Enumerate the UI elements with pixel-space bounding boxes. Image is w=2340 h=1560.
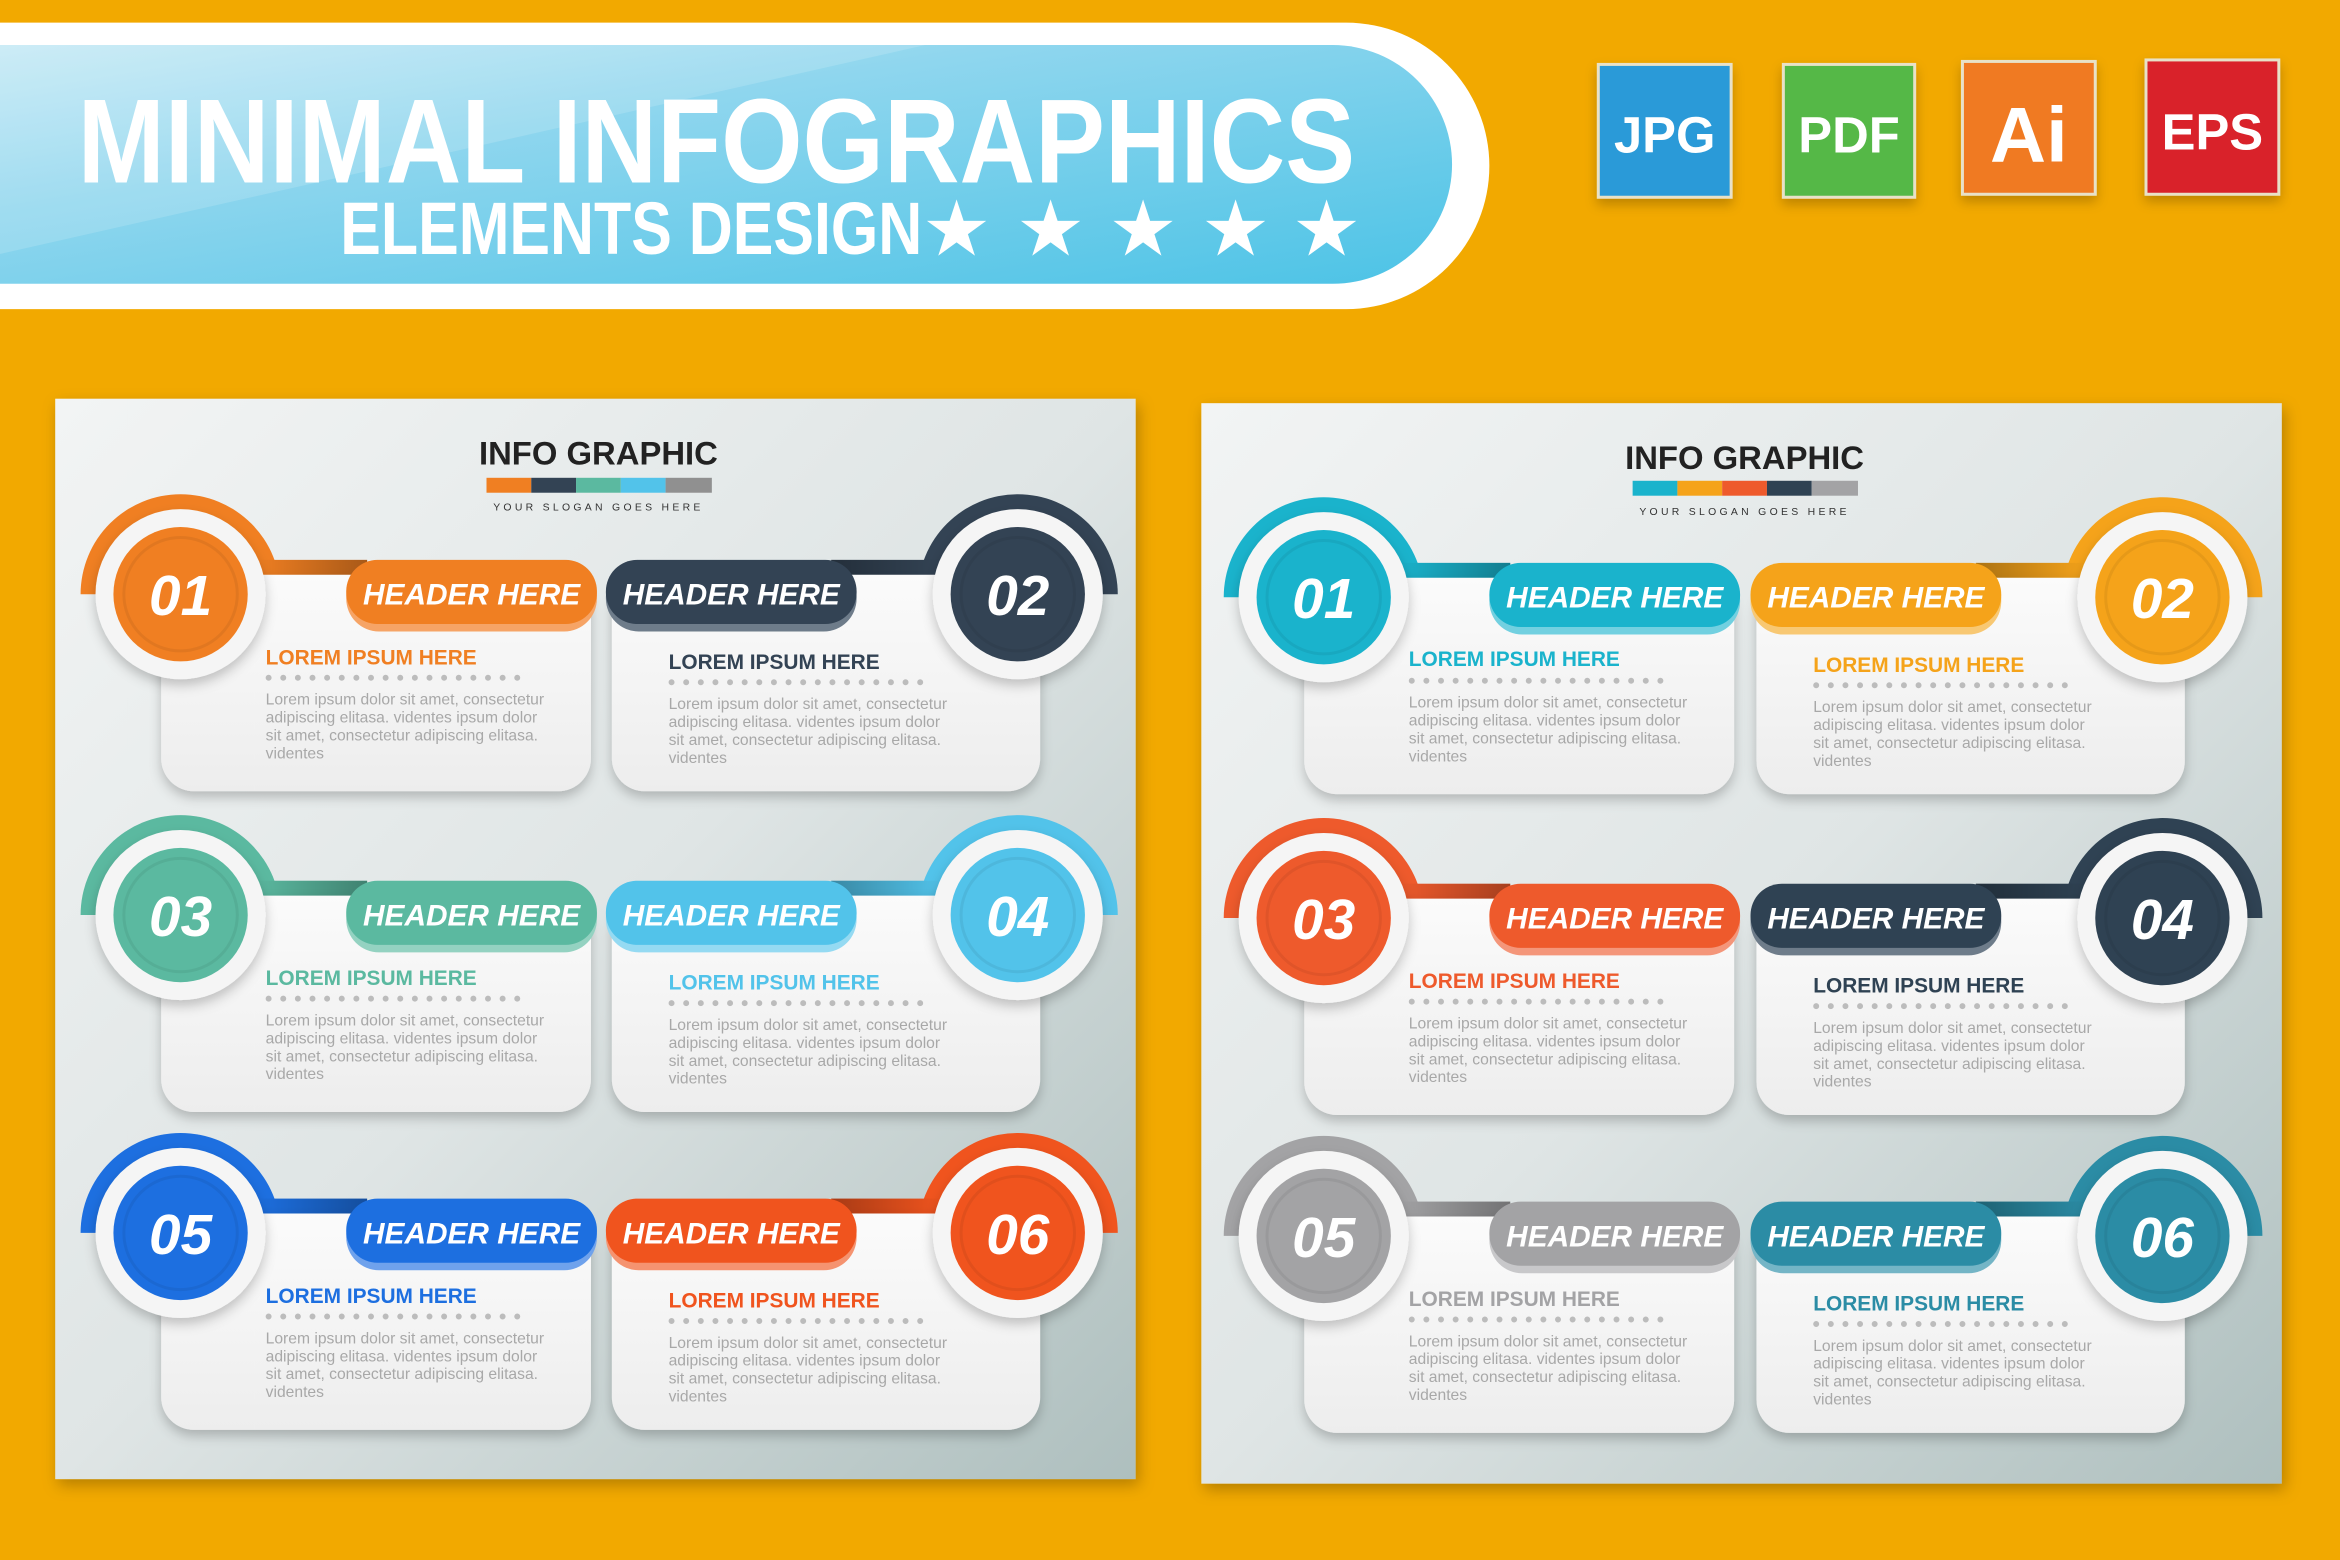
card 04: [606, 815, 1118, 1112]
card 06: 06: [986, 1204, 1050, 1267]
card 05 right: [1224, 1136, 1740, 1433]
card 03 right: sit amet, consectetur adipiscing elitasa.: [1409, 1051, 1681, 1068]
card 02: HEADER HERE: [623, 579, 841, 612]
card 05: LOREM IPSUM HERE: [266, 1285, 477, 1308]
card 04 right: HEADER HERE: [1767, 902, 1986, 935]
icon: Ai: Ai: [1990, 92, 2068, 178]
card 01: Lorem ipsum dolor sit amet, consectetur: [266, 692, 544, 709]
card 06 right: sit amet, consectetur adipiscing elitasa.: [1813, 1374, 2086, 1391]
icon: Ai: [1962, 61, 2095, 194]
card 04: adipiscing elitasa. videntes ipsum dolor: [669, 1035, 940, 1052]
card 06: adipiscing elitasa. videntes ipsum dolor: [669, 1353, 940, 1370]
card 03: sit amet, consectetur adipiscing elitasa.: [266, 1048, 538, 1065]
card 02: sit amet, consectetur adipiscing elitasa.: [669, 732, 941, 749]
card 05: HEADER HERE: [363, 1217, 581, 1250]
card 01: 01: [149, 565, 212, 628]
card 02 right: sit amet, consectetur adipiscing elitasa.: [1813, 735, 2086, 752]
card 05: 05: [149, 1204, 214, 1267]
card 03: LOREM IPSUM HERE: [266, 967, 477, 990]
heading: info graphic: INFO GRAPHIC: [479, 434, 718, 471]
card 04: sit amet, consectetur adipiscing elitasa.: [669, 1053, 941, 1070]
card 06: [606, 1133, 1118, 1430]
heading: info graphic: YOUR SLOGAN GOES HERE: [493, 503, 704, 514]
heading: info graphic: [479, 434, 718, 514]
card 05 right: HEADER HERE: [1506, 1220, 1724, 1253]
card 04: videntes: [669, 1071, 727, 1088]
card 04 right: sit amet, consectetur adipiscing elitasa.: [1813, 1056, 2086, 1073]
card 03: 03: [149, 886, 212, 949]
stars: ★: [1112, 190, 1174, 267]
card 06 right: 06: [2131, 1207, 2194, 1270]
card 01 right: [1224, 497, 1740, 794]
card 05: sit amet, consectetur adipiscing elitasa.: [266, 1366, 538, 1383]
card 05 right: videntes: [1409, 1387, 1467, 1404]
card 02 right: [1751, 497, 2262, 794]
card 01 right: Lorem ipsum dolor sit amet, consectetur: [1409, 695, 1687, 712]
card 05: [81, 1133, 597, 1430]
heading: info graphic right: [1625, 439, 1864, 518]
card 03 right: adipiscing elitasa. videntes ipsum dolor: [1409, 1033, 1680, 1050]
card 04: 04: [986, 886, 1049, 949]
card 02 right: adipiscing elitasa. videntes ipsum dolor: [1813, 717, 2085, 734]
stars: ★: [1296, 190, 1357, 267]
heading: info graphic right: INFO GRAPHIC: [1625, 439, 1864, 476]
card 02 right: Lorem ipsum dolor sit amet, consectetur: [1813, 699, 2092, 716]
card 02 right: 02: [2131, 568, 2194, 631]
card 03: [81, 815, 597, 1112]
banner: [0, 23, 1489, 309]
card 05 right: sit amet, consectetur adipiscing elitasa.: [1409, 1369, 1681, 1386]
card 02: videntes: [669, 750, 727, 767]
stars: ★: [1205, 190, 1266, 267]
card 06: HEADER HERE: [623, 1217, 841, 1250]
card 05 right: LOREM IPSUM HERE: [1409, 1288, 1620, 1311]
subtitle: ELEMENTS DESIGN: [340, 186, 922, 270]
stars: ★: [926, 190, 987, 267]
heading: info graphic right: YOUR SLOGAN GOES HERE: [1639, 507, 1850, 518]
card 01 right: videntes: [1409, 748, 1467, 765]
card 02: LOREM IPSUM HERE: [669, 651, 880, 674]
card 02 right: HEADER HERE: [1767, 582, 1986, 615]
card 01: sit amet, consectetur adipiscing elitasa.: [266, 727, 538, 744]
stars: ★: [1020, 190, 1081, 267]
icon: JPG: [1598, 64, 1731, 197]
icon: EPS: [2146, 60, 2279, 194]
card 03 right: LOREM IPSUM HERE: [1409, 970, 1620, 993]
card 03: Lorem ipsum dolor sit amet, consectetur: [266, 1012, 544, 1029]
card 06 right: Lorem ipsum dolor sit amet, consectetur: [1813, 1338, 2092, 1355]
card 02 right: videntes: [1813, 753, 1872, 770]
card 01: adipiscing elitasa. videntes ipsum dolor: [266, 710, 537, 727]
card 06: LOREM IPSUM HERE: [669, 1290, 880, 1313]
card 06: sit amet, consectetur adipiscing elitasa.: [669, 1371, 941, 1388]
icon: EPS: EPS: [2162, 103, 2263, 160]
card 02: Lorem ipsum dolor sit amet, consectetur: [669, 696, 947, 713]
card 03 right: Lorem ipsum dolor sit amet, consectetur: [1409, 1015, 1687, 1032]
card 06: Lorem ipsum dolor sit amet, consectetur: [669, 1335, 947, 1352]
panel: right infographic: [1201, 403, 2282, 1484]
card 04: Lorem ipsum dolor sit amet, consectetur: [669, 1017, 947, 1034]
card 01: LOREM IPSUM HERE: [266, 646, 477, 669]
icon: PDF: [1783, 64, 1915, 197]
card 05 right: 05: [1292, 1207, 1357, 1270]
card 03: HEADER HERE: [363, 900, 581, 933]
card 01 right: sit amet, consectetur adipiscing elitasa.: [1409, 730, 1681, 747]
card 04 right: Lorem ipsum dolor sit amet, consectetur: [1813, 1020, 2092, 1037]
card 03: adipiscing elitasa. videntes ipsum dolor: [266, 1030, 537, 1047]
card 01 right: 01: [1292, 568, 1355, 631]
card 01 right: adipiscing elitasa. videntes ipsum dolor: [1409, 713, 1680, 730]
card 02: [606, 494, 1118, 791]
panel: left infographic: [55, 399, 1136, 1479]
card 01: HEADER HERE: [363, 579, 581, 612]
card 01 right: HEADER HERE: [1506, 582, 1724, 615]
card 05 right: adipiscing elitasa. videntes ipsum dolor: [1409, 1351, 1680, 1368]
card 06 right: [1751, 1136, 2262, 1433]
card 04 right: LOREM IPSUM HERE: [1813, 975, 2024, 998]
card 06 right: HEADER HERE: [1767, 1220, 1986, 1253]
title: MINIMAL INFOGRAPHICS: [78, 75, 1355, 208]
card 03 right: [1224, 818, 1740, 1115]
card 02: 02: [986, 565, 1049, 628]
card 04 right: [1751, 818, 2262, 1115]
card 04: LOREM IPSUM HERE: [669, 972, 880, 995]
icon: PDF: PDF: [1798, 106, 1900, 163]
card 05: videntes: [266, 1384, 324, 1401]
icon: JPG: JPG: [1614, 106, 1715, 163]
card 06 right: adipiscing elitasa. videntes ipsum dolor: [1813, 1356, 2085, 1373]
card 01 right: LOREM IPSUM HERE: [1409, 648, 1620, 671]
card 04: HEADER HERE: [623, 900, 841, 933]
card 03 right: 03: [1292, 889, 1355, 952]
stars: [926, 190, 1357, 267]
card 06: videntes: [669, 1389, 727, 1406]
card 05: Lorem ipsum dolor sit amet, consectetur: [266, 1330, 544, 1347]
card 03 right: HEADER HERE: [1506, 902, 1724, 935]
card 06 right: LOREM IPSUM HERE: [1813, 1293, 2024, 1316]
card 01: [81, 494, 597, 791]
card 04 right: videntes: [1813, 1074, 1872, 1091]
card 05 right: Lorem ipsum dolor sit amet, consectetur: [1409, 1333, 1687, 1350]
card 02: adipiscing elitasa. videntes ipsum dolor: [669, 714, 940, 731]
card 04 right: 04: [2131, 889, 2194, 952]
card 03 right: videntes: [1409, 1069, 1467, 1086]
card 03: videntes: [266, 1066, 324, 1083]
card 06 right: videntes: [1813, 1392, 1872, 1409]
card 04 right: adipiscing elitasa. videntes ipsum dolor: [1813, 1038, 2085, 1055]
card 02 right: LOREM IPSUM HERE: [1813, 654, 2024, 677]
card 05: adipiscing elitasa. videntes ipsum dolor: [266, 1348, 537, 1365]
card 01: videntes: [266, 745, 324, 762]
